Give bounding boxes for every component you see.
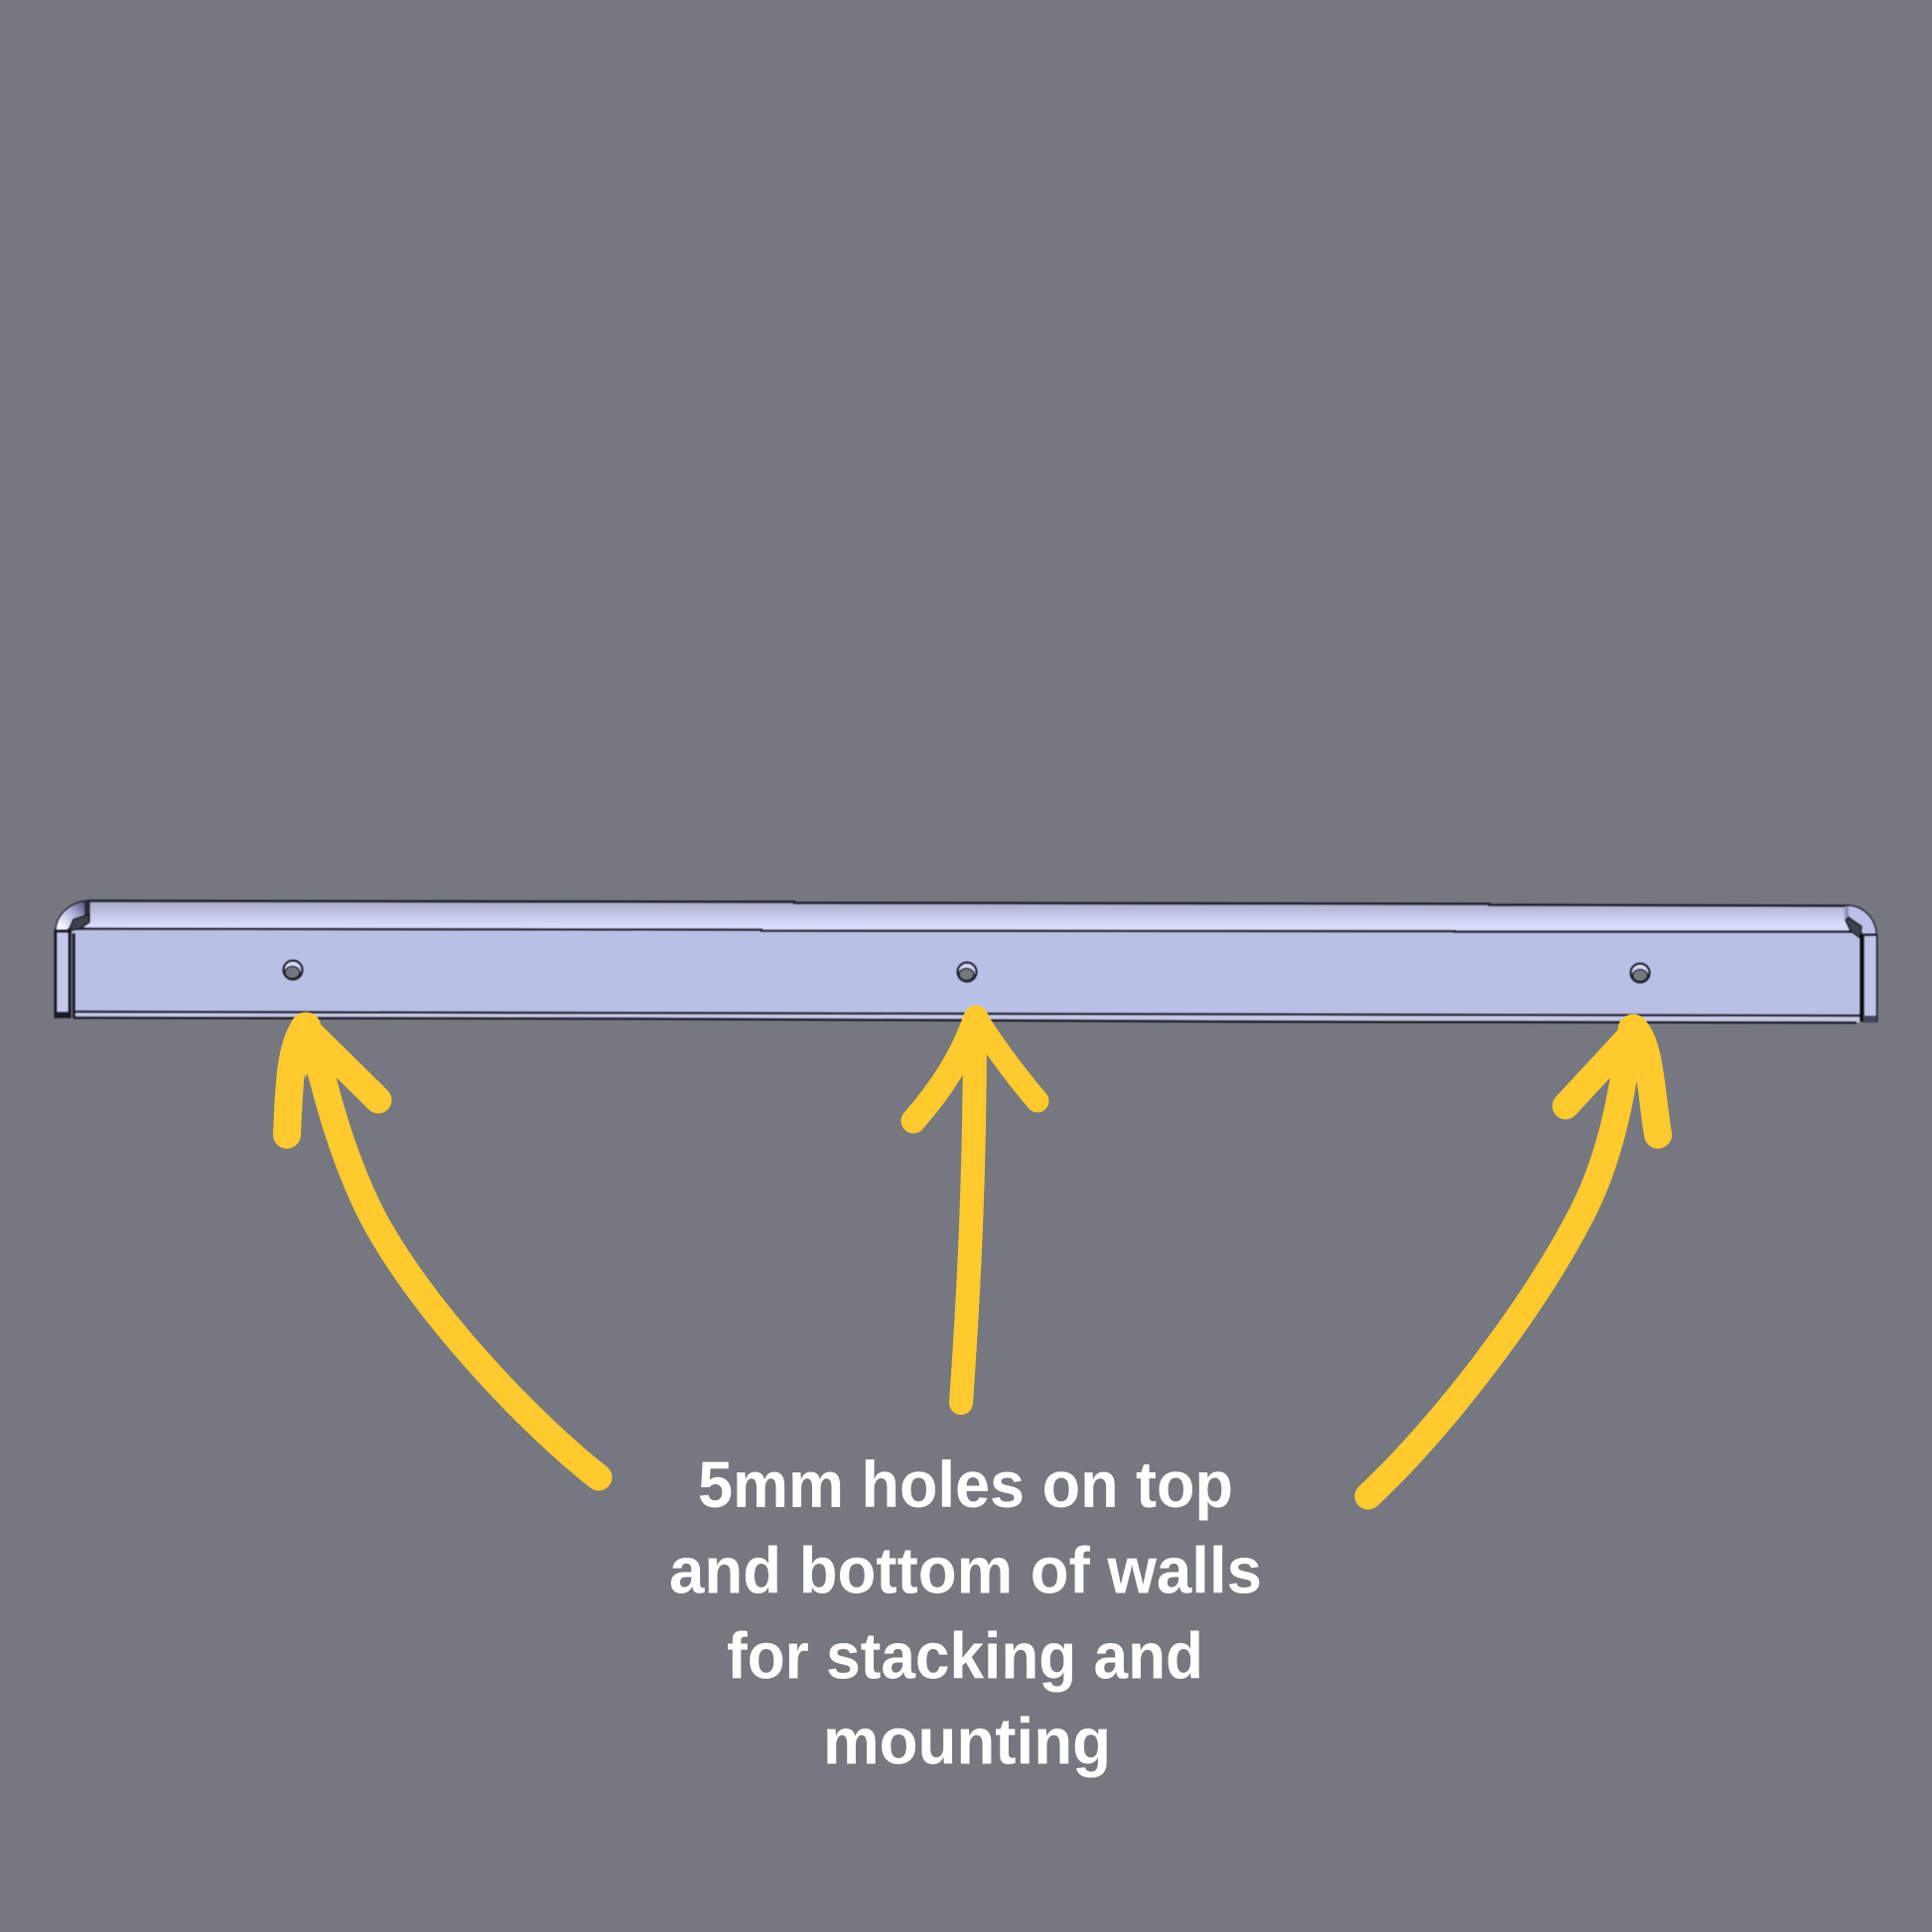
caption: mounting <box>823 1704 1111 1777</box>
left corner and flange <box>55 900 89 1018</box>
arrow: left <box>287 1013 599 1477</box>
caption <box>669 1448 1262 1777</box>
caption: 5mm holes on top <box>698 1448 1233 1521</box>
right corner and flange <box>1845 905 1876 1023</box>
caption: for stacking and <box>727 1618 1203 1692</box>
hole middle <box>957 963 977 981</box>
bottom lip <box>72 1012 1860 1023</box>
outline edges <box>73 901 1860 1023</box>
caption: and bottom of walls <box>669 1533 1262 1606</box>
main face panel <box>72 928 1860 1016</box>
hole right <box>1630 963 1650 983</box>
hole left <box>284 961 302 979</box>
arrow: right <box>1368 1015 1658 1496</box>
drawing: steel wall profile <box>55 900 1876 1023</box>
top rounded strip <box>72 900 1860 933</box>
arrow: middle <box>913 1018 1037 1403</box>
